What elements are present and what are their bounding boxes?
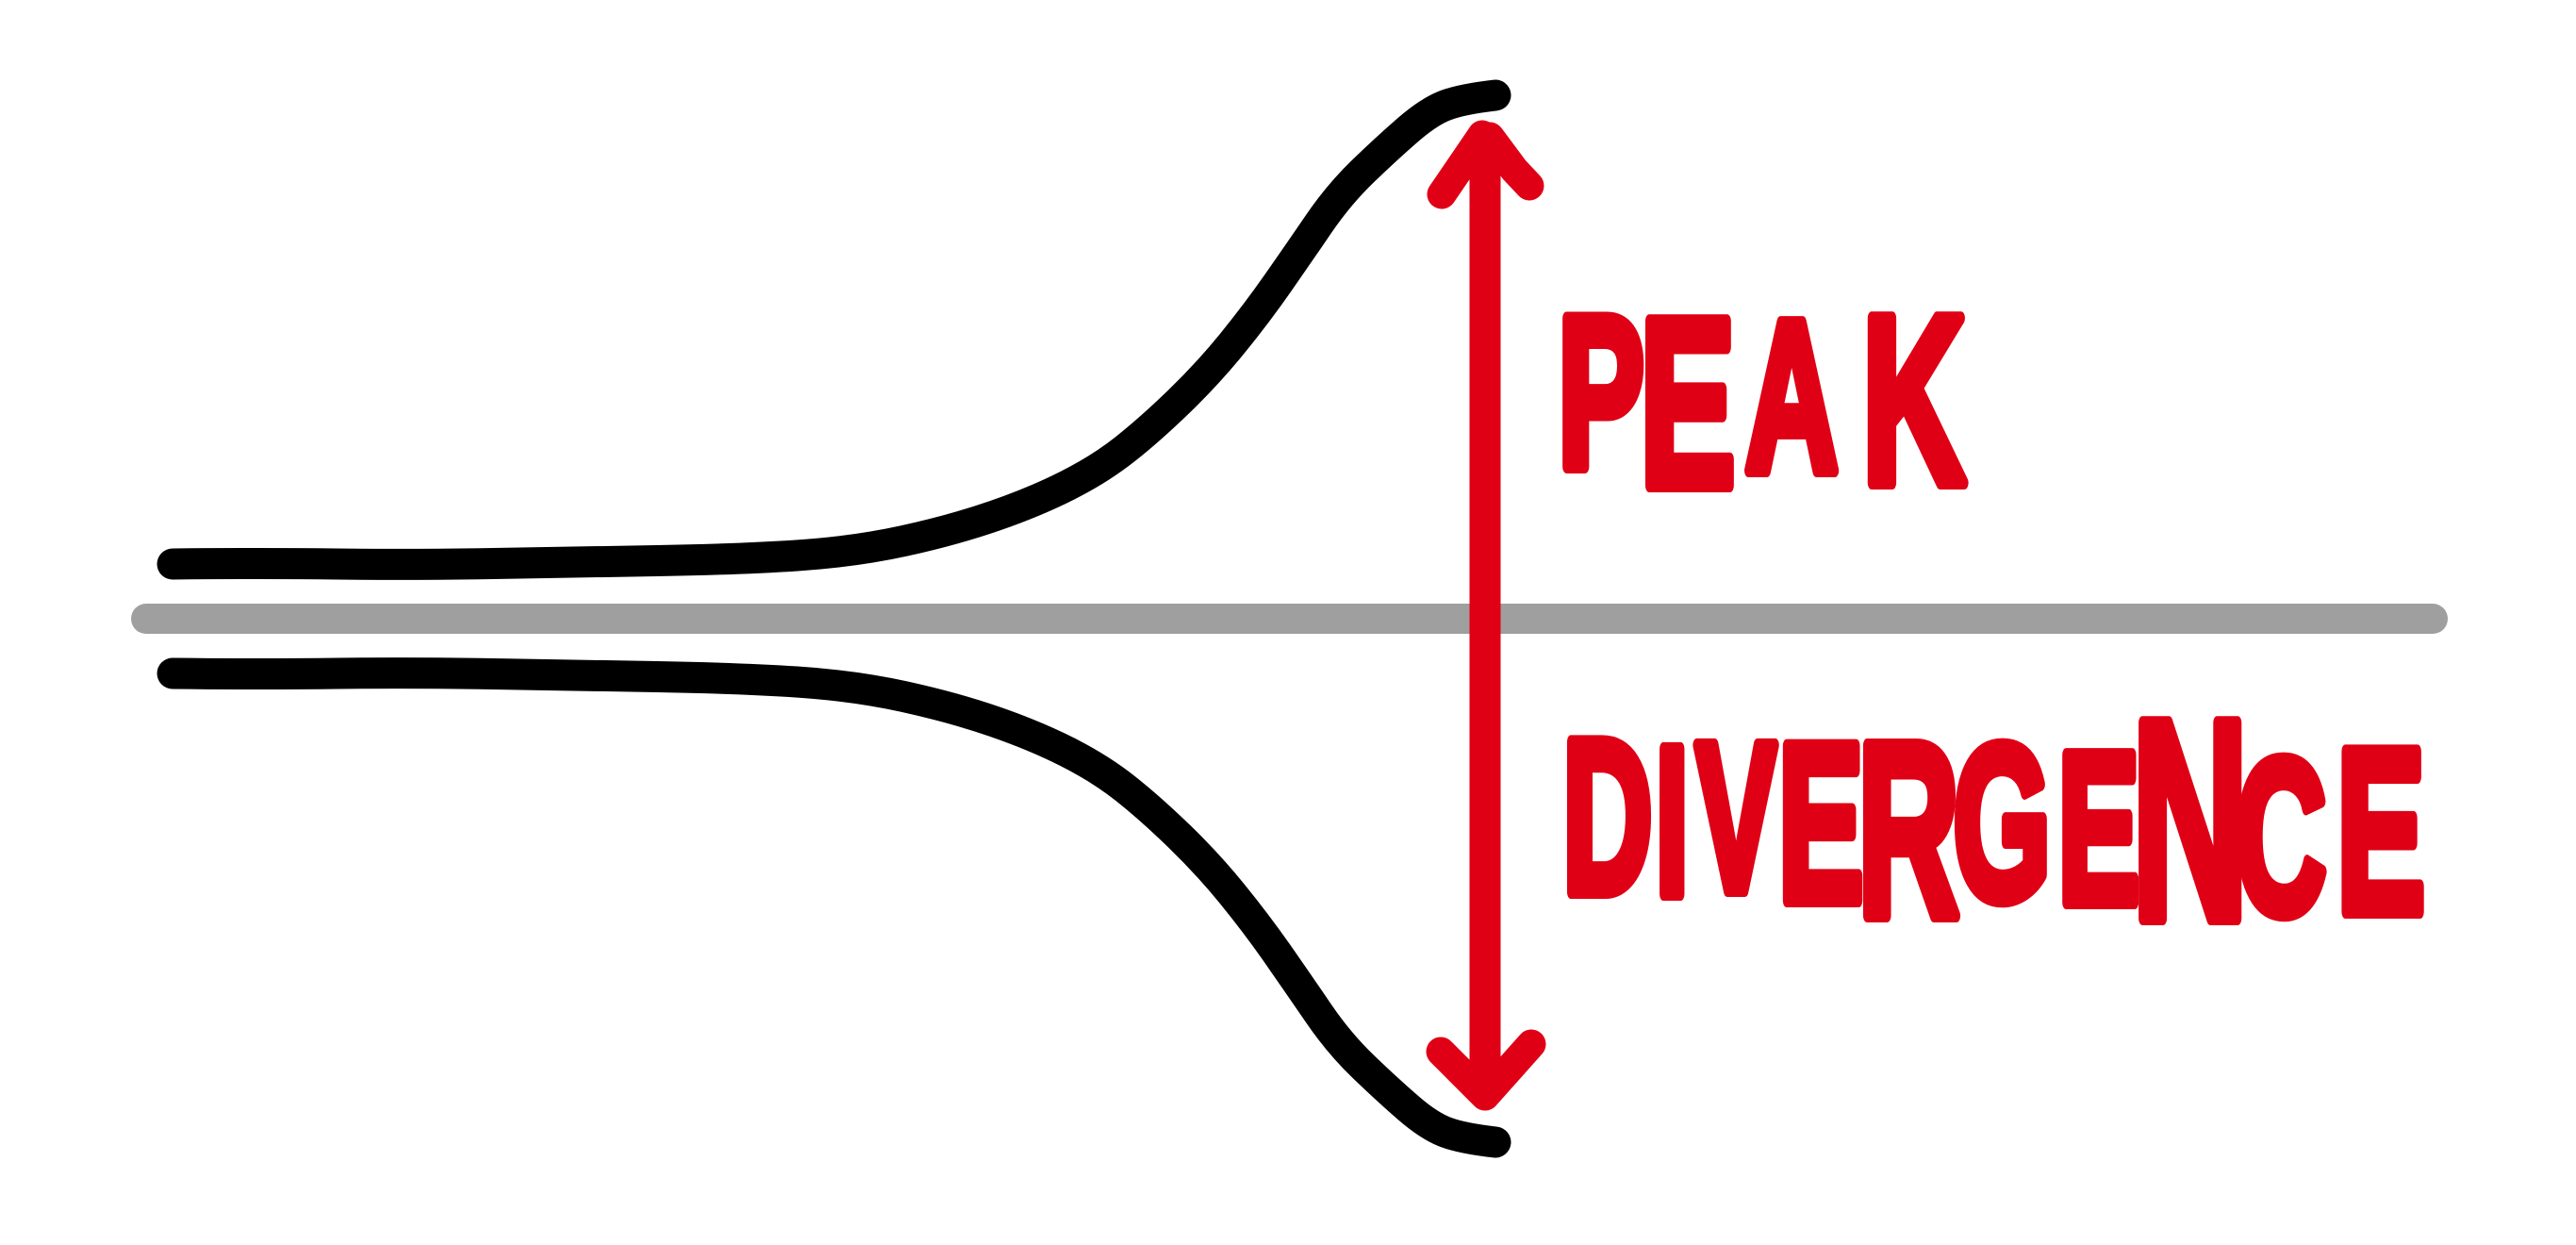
label: PEAK: A — [1745, 276, 1839, 517]
red double-headed arrow — [1441, 135, 1531, 1096]
label: DIVERGENCE: E — [1778, 698, 1864, 950]
grey centre line — [146, 604, 2433, 634]
label: DIVERGENCE: N — [2132, 661, 2249, 980]
upper black curve — [173, 95, 1495, 564]
label: DIVERGENCE: C — [2236, 715, 2326, 960]
label: PEAK: P — [1558, 273, 1644, 514]
label: DIVERGENCE: E — [2058, 709, 2139, 949]
label: PEAK: E — [1640, 270, 1736, 538]
label: DIVERGENCE: I — [1656, 703, 1689, 939]
label: DIVERGENCE: R — [1858, 692, 1959, 970]
lower black curve — [173, 673, 1495, 1142]
label: DIVERGENCE: E — [2337, 700, 2425, 962]
label: DIVERGENCE: D — [1562, 695, 1653, 939]
label: DIVERGENCE: G — [1953, 701, 2051, 946]
label: PEAK: K — [1862, 267, 1966, 535]
label: DIVERGENCE: V — [1696, 699, 1776, 936]
